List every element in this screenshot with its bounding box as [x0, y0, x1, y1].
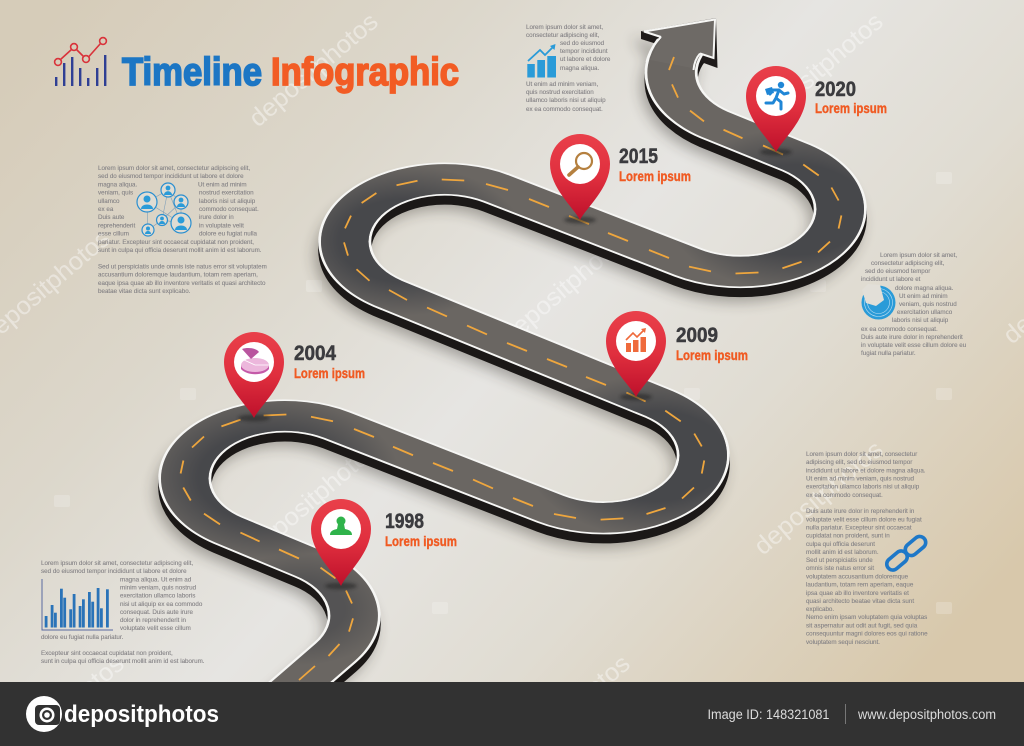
- icon: chain link: [884, 534, 928, 572]
- title: Infographic: [271, 51, 459, 94]
- text block: upper left: reprehenderit: [98, 222, 135, 230]
- text block: lower left: exercitation ullamco laboris: [120, 592, 195, 600]
- text block: upper left: [98, 165, 267, 295]
- text block: upper left: nostrud exercitation: [199, 190, 254, 196]
- text block: lower right: exercitation ullamco laboris nisi ut aliquip: [806, 484, 920, 490]
- text block: upper left: sed do eiusmod tempor incididunt ut labore et dolore: [98, 173, 244, 180]
- label: 1998: 1998: [385, 510, 424, 533]
- text block: lower right: cupidatat non proident, sunt in: [806, 532, 890, 540]
- text block: top centre: [526, 24, 611, 113]
- text block: top centre: Lorem ipsum dolor sit amet,: [526, 24, 603, 31]
- text block: right: dolore magna aliqua.: [895, 285, 954, 292]
- text block: lower right: [806, 451, 928, 646]
- text block: lower right: mollit anim id est laborum.: [806, 549, 879, 556]
- text block: upper left: laboris nisi ut aliquip: [199, 198, 256, 205]
- text block: upper left: Duis aute: [98, 214, 125, 221]
- pin: 2020: [746, 66, 806, 156]
- text block: upper left: ex ea: [98, 206, 114, 213]
- text block: upper left: accusantium doloremque laudantium, totam rem aperiam,: [98, 272, 258, 278]
- text block: top centre: ullamco laboris nisi ut aliquip: [526, 97, 606, 104]
- arrow head: [642, 18, 716, 70]
- text block: right: Ut enim ad minim: [899, 293, 948, 300]
- text block: upper left: dolore eu fugiat nulla: [199, 230, 258, 238]
- text block: right: [861, 252, 967, 357]
- text block: lower left: Excepteur sint occaecat cupidatat non proident,: [41, 650, 173, 657]
- footer logo icon: camera: [26, 696, 62, 732]
- text block: lower right: ex ea commodo consequat.: [806, 492, 883, 499]
- text block: lower right: ipsa quae ab illo inventore veritatis et: [806, 590, 909, 597]
- icon: magnifier: [569, 153, 592, 175]
- text block: upper left: sunt in culpa qui officia deserunt mollit anim id est laborum.: [98, 247, 262, 254]
- text block: upper left: eaque ipsa quae ab illo inventore veritatis et quasi architecto: [98, 280, 266, 287]
- text block: right: Lorem ipsum dolor sit amet,: [880, 252, 957, 259]
- pin: 1998: [311, 499, 371, 590]
- text block: top centre: ex ea commodo consequat.: [526, 106, 603, 113]
- pin: 2009: [606, 311, 666, 400]
- label: 2020: [815, 78, 887, 116]
- text block: lower right: sit aspernatur aut odit aut fugit, sed quia: [806, 622, 918, 630]
- text block: lower right: consequuntur magni dolores eos qui ratione: [806, 630, 928, 638]
- text block: upper left: Sed ut perspiciatis unde omnis iste natus error sit voluptatem: [98, 264, 267, 270]
- text block: right: Duis aute irure dolor in reprehenderit: [861, 334, 963, 341]
- watermarks: depositphotos: [244, 435, 384, 561]
- text block: right: sed do eiusmod tempor: [865, 268, 930, 275]
- text block: upper left: esse cillum: [98, 230, 129, 238]
- label: 2015: 2015: [619, 145, 658, 168]
- icon: pie chart: [241, 348, 269, 374]
- text block: lower right: Nemo enim ipsam voluptatem quia voluptas: [806, 614, 927, 621]
- text block: lower left: voluptate velit esse cillum: [120, 625, 191, 632]
- watermarks: depositphotos: [244, 7, 384, 133]
- text block: lower right: voluptatem sequi nesciunt.: [806, 639, 880, 646]
- watermarks: depositphotos: [496, 224, 636, 350]
- text block: upper left: commodo consequat.: [199, 206, 259, 213]
- road surface: [185, 46, 840, 734]
- text block: lower left: [41, 560, 205, 665]
- text block: top centre: ut labore et dolore: [560, 56, 611, 63]
- text block: right: laboris nisi ut aliquip: [892, 317, 949, 324]
- icon: growth chart: [527, 44, 556, 78]
- text block: lower right: explicabo.: [806, 606, 834, 613]
- footer url: www.depositphotos.com: [857, 707, 996, 722]
- label: 1998: Lorem ipsum: [385, 533, 457, 549]
- icon: radial donut chart: [862, 284, 896, 320]
- text block: right: ex ea commodo consequat.: [861, 326, 938, 333]
- text block: lower right: quasi architecto beatae vitae dicta sunt: [806, 598, 914, 605]
- icon: running man: [765, 82, 788, 109]
- text block: lower left: dolore eu fugiat nulla pariatur.: [41, 634, 124, 641]
- road side wall: [185, 18, 840, 743]
- label: 2009: [676, 324, 748, 363]
- text block: lower right: adipiscing elit, sed do eiusmod tempor: [806, 459, 912, 466]
- text block: top centre: sed do eiusmod: [560, 40, 605, 47]
- text block: right: exercitation ullamco: [897, 309, 953, 316]
- text block: lower right: nulla pariatur. Excepteur sint occaecat: [806, 524, 912, 532]
- text block: lower left: sed do eiusmod tempor incididunt ut labore et dolore: [41, 568, 187, 575]
- footer logo wordmark: depositphotos: [64, 701, 219, 728]
- text block: top centre: quis nostrud exercitation: [526, 89, 594, 96]
- text block: right: incididunt ut labore et: [861, 276, 921, 283]
- text block: lower left: magna aliqua. Ut enim ad: [120, 576, 192, 584]
- text block: lower left: consequat. Duis aute irure: [120, 609, 193, 616]
- text block: lower right: Ut enim ad minim veniam, quis nostrud: [806, 476, 915, 482]
- label: 2004: [294, 342, 365, 381]
- text block: lower left: minim veniam, quis nostrud: [120, 584, 197, 592]
- text block: top centre: consectetur adipiscing elit,: [526, 32, 600, 39]
- text block: lower right: laudantium, totam rem aperiam, eaque: [806, 582, 914, 588]
- text block: upper left: in voluptate velit: [199, 222, 244, 230]
- label: 2009: Lorem ipsum: [676, 347, 748, 363]
- pin: 2015: [550, 134, 610, 224]
- text block: upper left: Ut enim ad minim: [198, 182, 247, 188]
- text block: lower right: incididunt ut labore et dolore magna aliqua.: [806, 468, 926, 474]
- label: 2009: 2009: [676, 324, 718, 347]
- text block: right: in voluptate velit esse cillum dolore eu: [861, 342, 967, 349]
- centre line dashes: [181, 57, 841, 680]
- footer divider: [845, 704, 846, 724]
- text block: lower right: omnis iste natus error sit: [806, 565, 874, 572]
- road shadow: [181, 38, 836, 746]
- title icon: bars and trend line: [55, 38, 106, 86]
- label: 2015: Lorem ipsum: [619, 168, 691, 184]
- text block: lower right: Sed ut perspiciatis unde: [806, 557, 873, 564]
- watermarks: depositphotos: [749, 7, 889, 133]
- text block: top centre: magna aliqua.: [560, 65, 600, 72]
- text block: upper left: Lorem ipsum dolor sit amet, consectetur adipiscing elit,: [98, 165, 250, 172]
- text block: top centre: Ut enim ad minim veniam,: [526, 81, 599, 88]
- road: winding timeline with arrow: [181, 18, 841, 743]
- bar chart: [42, 579, 113, 630]
- icon: people network: [137, 183, 191, 236]
- label: 1998: [385, 510, 457, 549]
- text block: lower right: voluptatem accusantium doloremque: [806, 574, 909, 580]
- text block: top centre: tempor incididunt: [560, 48, 608, 55]
- text block: lower right: voluptate velit esse cillum dolore eu fugiat: [806, 516, 922, 524]
- text block: right: consectetur adipiscing elit,: [871, 260, 945, 267]
- text block: upper left: beatae vitae dicta sunt explicabo.: [98, 288, 191, 295]
- footer bar: [0, 682, 1024, 746]
- text block: upper left: pariatur. Excepteur sint occaecat cupidatat non proident,: [98, 239, 254, 246]
- watermarks: depositphotos: [749, 435, 889, 561]
- label: 2015: [619, 145, 691, 184]
- footer image id: Image ID: 148321081: [708, 707, 830, 722]
- text block: upper left: irure dolor in: [199, 214, 234, 221]
- text block: lower left: sunt in culpa qui officia deserunt mollit anim id est laborum.: [41, 658, 205, 665]
- text block: right: fugiat nulla pariatur.: [861, 350, 916, 357]
- text block: lower left: Lorem ipsum dolor sit amet, consectetur adipiscing elit,: [41, 560, 193, 567]
- label: 2020: 2020: [815, 78, 856, 101]
- title: [122, 51, 459, 94]
- pin: 2004: [224, 332, 284, 422]
- text block: upper left: ullamco: [98, 198, 120, 205]
- label: 2004: Lorem ipsum: [294, 365, 365, 381]
- text block: right: veniam, quis nostrud: [899, 301, 957, 308]
- text block: lower right: culpa qui officia deserunt: [806, 541, 875, 548]
- title: Timeline: [122, 51, 262, 94]
- text block: upper left: magna aliqua.: [98, 182, 138, 188]
- label: 2020: Lorem ipsum: [815, 100, 887, 116]
- label: 2004: 2004: [294, 342, 336, 365]
- text block: lower left: dolor in reprehenderit in: [120, 617, 187, 624]
- text block: upper left: veniam, quis: [98, 190, 133, 196]
- text block: lower right: Duis aute irure dolor in reprehenderit in: [806, 508, 915, 515]
- text block: lower left: nisi ut aliquip ex ea commodo: [120, 601, 203, 608]
- icon: person: [330, 516, 352, 535]
- text block: lower right: Lorem ipsum dolor sit amet, consectetur: [806, 451, 917, 458]
- icon: rising chart: [626, 328, 646, 352]
